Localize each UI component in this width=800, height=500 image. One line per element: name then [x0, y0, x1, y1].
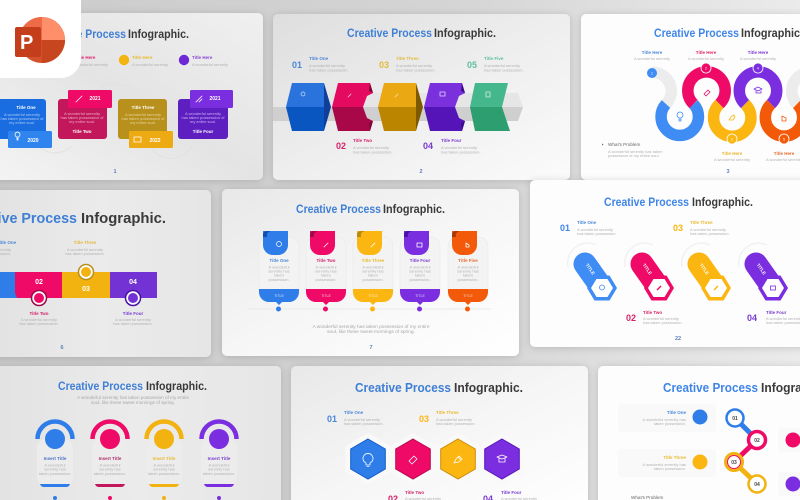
column: title four: Title Four — [410, 258, 430, 263]
card: title three: taken possession. — [654, 466, 686, 471]
legend row: Title Here — [75, 55, 96, 60]
labels: bottom row: Title Here — [722, 151, 743, 156]
card: title one: Title One — [667, 410, 686, 415]
page number: 7 — [369, 345, 373, 351]
hexagon: purple — [424, 83, 465, 131]
labels: bottom row: Title Here — [774, 151, 795, 156]
heading: slide 8: Infographic. — [454, 380, 523, 395]
card: insert title pink: serenity has — [99, 466, 121, 472]
card: title one: A wonderful serenity — [4, 112, 40, 117]
step dots: 4 — [757, 66, 759, 70]
labels: top row: has taken possession. — [577, 231, 617, 236]
labels: bottom row: has taken possession. — [643, 320, 683, 325]
card: title four: my entire soul. — [190, 119, 216, 124]
card: insert title blue: Insert Title — [44, 456, 67, 461]
column: title four: serenity has — [409, 268, 431, 274]
card: insert title yellow: taken possession. — [148, 471, 180, 476]
labels: bottom row: A wonderful serenity — [714, 157, 750, 162]
heading: slide 8: Creative Process — [355, 380, 451, 395]
column: title one: possession. — [268, 277, 290, 282]
labels: bottom row — [388, 490, 537, 500]
heading: slide 9: Creative Process — [663, 380, 758, 395]
labels: bottom row: 04 — [423, 141, 433, 151]
column: title two — [306, 231, 346, 312]
column: title one: A wonderful — [269, 264, 290, 270]
labels: bottom row: 04 — [747, 313, 757, 323]
column: title one: taken — [274, 272, 284, 278]
page number: 6 — [60, 345, 64, 351]
note: what's problem — [602, 142, 662, 158]
labels: top row: 01 — [560, 223, 570, 233]
card: insert title blue: taken possession. — [39, 471, 71, 476]
panel: slide 3 snake path — [581, 14, 800, 180]
card: title one: has taken possession of — [1, 116, 44, 121]
card: insert title pink: Insert Title — [99, 456, 122, 461]
right icons — [778, 428, 800, 496]
column: title two: A wonderful — [316, 264, 337, 270]
panel: slide 4 ribbon steps — [0, 190, 211, 357]
node network: 01 — [732, 416, 738, 422]
panel: slide 7 arched cards — [0, 366, 281, 500]
labels: top row: Title Here — [748, 50, 769, 55]
column: title two: possession. — [315, 277, 337, 282]
labels: Title Four — [123, 311, 143, 316]
heading: slide 5: Infographic. — [383, 204, 445, 216]
panel: slide 9 node network — [598, 366, 800, 500]
labels: top row: Title Here — [696, 50, 717, 55]
ribbon bar: 04 — [129, 279, 137, 286]
labels: top row: 01 — [292, 60, 302, 70]
card: title one — [618, 404, 716, 432]
node network — [726, 410, 766, 492]
labels: has taken possession. — [65, 251, 105, 256]
hexagon: yellow — [378, 83, 423, 131]
labels: A wonderful serenity — [67, 247, 103, 252]
labels: top row: Title One — [344, 410, 364, 415]
card: insert title pink: A wonderful — [100, 462, 121, 468]
card: title four: A wonderful serenity — [185, 111, 221, 116]
column: title one: serenity has — [268, 268, 290, 274]
labels: top row — [634, 50, 776, 61]
column: title four: A wonderful — [410, 264, 431, 270]
heading: slide 4: Infographic. — [81, 210, 166, 227]
step dots: 5 — [783, 138, 785, 142]
step dots: 1 — [651, 72, 653, 76]
labels: top row: Title One — [309, 56, 329, 61]
hexagon: yellow — [436, 433, 480, 485]
column: title four: taken — [415, 272, 425, 278]
labels: top row: A wonderful serenity — [396, 63, 432, 68]
card: insert title blue: A wonderful — [45, 462, 66, 468]
labels: bottom row: Title Four — [441, 138, 462, 143]
ribbon bar: 02 — [35, 279, 43, 286]
card: title one: A wonderful serenity has — [642, 417, 686, 422]
card: insert title blue — [37, 422, 73, 500]
column: title four — [400, 231, 440, 312]
badge: PowerPoint logo: P — [20, 32, 33, 54]
note: what's problem: What's Problem — [631, 495, 663, 500]
column: title three — [353, 231, 393, 312]
labels: bottom row: Title Two — [643, 310, 662, 315]
column: title five — [448, 231, 488, 312]
node network: 03 — [731, 460, 737, 466]
labels: top row: has taken possession. — [396, 68, 436, 72]
card: title three: Title Three — [663, 455, 686, 460]
ribbon bar: 03 — [82, 286, 90, 293]
card: title one: taken possession. — [654, 421, 686, 426]
note: what's problem: possession of my entire soul. — [608, 153, 660, 158]
labels: bottom row: 02 — [626, 313, 636, 323]
labels: has taken possession. — [113, 321, 153, 326]
legend row: A wonderful serenity — [132, 62, 168, 67]
labels: bottom row — [714, 151, 800, 162]
card: insert title purple: taken possession. — [203, 471, 235, 476]
labels: top row: A wonderful serenity — [740, 56, 776, 61]
column: title three: possession. — [362, 277, 384, 282]
caption — [312, 324, 430, 335]
capsule: blue: TITLE — [585, 263, 596, 276]
subtitle: A wonderful serenity has taken possession of my entire — [77, 395, 189, 400]
labels: bottom row: Title Four — [501, 490, 522, 495]
labels: top row: Title Three — [690, 220, 713, 225]
heading: slide 2: Creative Process — [347, 28, 432, 40]
card: title four: Title Four — [193, 129, 213, 134]
ribbon bar — [0, 272, 157, 298]
labels: top row: 05 — [467, 60, 477, 70]
hexagon: blue — [286, 83, 331, 131]
timeline — [248, 308, 491, 310]
labels: top row: A wonderful serenity — [688, 56, 724, 61]
card: insert title yellow: A wonderful — [154, 462, 175, 468]
labels: bottom row: Title Two — [353, 138, 372, 143]
card: title one — [0, 99, 52, 148]
labels: top row: A wonderful serenity — [309, 63, 345, 68]
capsule: pink — [625, 243, 674, 300]
labels: top row: Title Here — [642, 50, 663, 55]
labels — [0, 240, 153, 326]
page number: 1 — [113, 169, 117, 175]
capsule: yellow: TITLE — [699, 263, 710, 276]
column: title two: Title Two — [316, 258, 336, 263]
card: title two: 2021 — [89, 96, 101, 102]
labels: top row: has taken possession. — [690, 231, 730, 236]
labels: top row: 03 — [673, 223, 683, 233]
card: title two: has taken possession of — [61, 115, 104, 120]
card: title three: A wonderful serenity — [125, 112, 161, 117]
column: title two: taken — [321, 272, 331, 278]
panel: slide 2 hexagon band — [273, 14, 570, 180]
labels: top row — [292, 56, 524, 72]
card: insert title blue: serenity has — [44, 466, 66, 472]
card: title three: 2022 — [149, 138, 161, 144]
card: title three: A wonderful serenity has — [642, 462, 686, 467]
card: insert title yellow: Insert Title — [153, 456, 176, 461]
column: title three: TITLE — [368, 294, 378, 298]
panel: slide 5 tag columns — [222, 189, 519, 356]
card: insert title purple — [201, 422, 237, 500]
card: title four: 2021 — [209, 96, 221, 102]
step dots: 2 — [705, 66, 707, 70]
legend row: Title Here — [192, 55, 213, 60]
column: title five: TITLE — [463, 294, 473, 298]
column: title five: serenity has — [457, 268, 479, 274]
hexagon: blue — [346, 433, 390, 485]
badge: PowerPoint logo — [0, 0, 81, 78]
caption: soul, like these sweet mornings of spring. — [327, 329, 415, 335]
labels: bottom row: A wonderful serenity — [441, 145, 477, 150]
labels: top row: 03 — [419, 414, 429, 424]
panel: slide 6 capsules — [530, 180, 800, 347]
column: title one: Title One — [269, 258, 289, 263]
legend row: Title Here — [132, 55, 153, 60]
column: title two: TITLE — [321, 294, 331, 298]
card: insert title purple: A wonderful — [209, 462, 230, 468]
labels: top row: has taken possession. — [484, 68, 524, 72]
column: title five: A wonderful — [458, 264, 479, 270]
column: title five: taken — [463, 272, 473, 278]
column: title four: possession. — [409, 277, 431, 282]
labels: has taken possession. — [19, 321, 59, 326]
labels: Title Two — [29, 311, 49, 316]
gray band arrow — [273, 93, 523, 121]
heading: slide 6: Infographic. — [692, 197, 753, 209]
card: insert title yellow — [146, 422, 182, 500]
card: title four — [178, 90, 233, 139]
card: title two: my entire soul. — [69, 119, 95, 124]
heading: slide 1: Infographic. — [128, 29, 189, 41]
note: what's problem: What's Problem — [608, 142, 640, 147]
labels: top row: A wonderful serenity — [634, 56, 670, 61]
card: title one: my entire soul. — [9, 120, 35, 125]
legend row — [72, 55, 228, 67]
labels: bottom row — [336, 138, 481, 154]
card: title three: has taken possession of — [122, 116, 165, 121]
card: title two: A wonderful serenity — [64, 111, 100, 116]
capsule: blue — [568, 243, 617, 300]
subtitle: soul, like these sweet mornings of spring. — [91, 400, 175, 405]
column: title four: TITLE — [415, 294, 425, 298]
node network: 02 — [754, 438, 760, 444]
labels: top row: 01 — [327, 414, 337, 424]
card: title three: Title Three — [132, 105, 155, 110]
card: title three: my entire soul. — [130, 120, 156, 125]
heading: slide 7: Creative Process — [58, 381, 143, 393]
capsule: yellow — [682, 243, 731, 300]
subtitle — [77, 395, 189, 405]
legend row: A wonderful serenity — [72, 62, 108, 67]
labels: top row: A wonderful serenity — [344, 417, 380, 422]
labels: bottom row: has taken possession. — [441, 150, 481, 154]
column: title two: serenity has — [315, 268, 337, 274]
node network: 04 — [754, 482, 760, 488]
labels: bottom row: Title Two — [405, 490, 424, 495]
step dots: 3 — [731, 138, 733, 142]
heading: slide 3: Creative Process — [654, 28, 739, 40]
card: title two — [58, 90, 112, 139]
hexagon: purple — [480, 433, 524, 485]
card: title three — [618, 449, 716, 477]
heading: slide 5: Creative Process — [296, 204, 381, 216]
heading: slide 6: Creative Process — [604, 197, 689, 209]
hexagon: pink — [332, 83, 373, 131]
labels: top row: has taken possession. — [344, 421, 384, 426]
legend row: A wonderful serenity — [192, 62, 228, 67]
step badges — [32, 264, 140, 306]
panel: slide 1 timeline cards — [0, 13, 263, 180]
labels: A wonderful serenity — [115, 317, 151, 322]
labels: top row: Title Five — [484, 56, 504, 61]
labels: top row: has taken possession. — [436, 421, 476, 426]
hexagon: pink — [390, 433, 436, 485]
panel: slide 8 hexagons — [291, 366, 588, 500]
column: title three: Title Three — [362, 258, 385, 263]
labels: Title Three — [74, 240, 97, 245]
icons — [677, 87, 786, 121]
card: title one: Title One — [16, 105, 36, 110]
labels: bottom row: 02 — [336, 141, 346, 151]
card: insert title pink — [92, 422, 128, 500]
card: insert title pink: taken possession. — [94, 471, 126, 476]
column: title one — [259, 231, 299, 312]
labels: bottom row: A wonderful serenity — [353, 145, 389, 150]
card: insert title purple: serenity has — [208, 466, 230, 472]
column: title one: TITLE — [274, 294, 284, 298]
labels: top row: Title One — [577, 220, 597, 225]
labels: bottom row: A wonderful serenity — [643, 316, 679, 321]
labels: top row — [327, 410, 476, 426]
labels: top row: A wonderful serenity — [690, 227, 726, 232]
page number: 2 — [419, 169, 423, 175]
heading: slide 1: Creative Process — [41, 29, 126, 41]
step dots — [647, 63, 789, 144]
card: title two: Title Two — [72, 129, 92, 134]
card: title one: 2020 — [27, 138, 39, 144]
column: title five: Title Five — [458, 258, 478, 263]
labels: top row: Title Three — [436, 410, 459, 415]
capsule: pink: TITLE — [642, 263, 653, 276]
card: title three — [118, 99, 173, 148]
snake chart — [652, 72, 800, 136]
column: title three: A wonderful — [363, 264, 384, 270]
labels: A wonderful serenity — [21, 317, 57, 322]
page number: 22 — [675, 336, 681, 342]
labels: top row: 03 — [379, 60, 389, 70]
page number: 3 — [726, 169, 730, 175]
labels: top row: has taken possession. — [309, 68, 349, 72]
hexagon: green — [470, 83, 510, 131]
labels: bottom row — [626, 310, 800, 325]
note: what's problem: A wonderful serenity has taken — [608, 149, 662, 154]
card: title four: has taken possession of — [182, 115, 225, 120]
labels: top row — [560, 220, 730, 236]
heading: slide 7: Infographic. — [146, 381, 207, 393]
column: title three: taken — [368, 272, 378, 278]
labels: bottom row: has taken possession. — [353, 150, 393, 154]
capsule: purple — [739, 243, 788, 300]
capsule: purple: TITLE — [756, 263, 767, 276]
labels: top row: A wonderful serenity — [577, 227, 613, 232]
card: insert title purple: Insert Title — [208, 456, 231, 461]
caption: A wonderful serenity has taken possession of my entire — [312, 324, 430, 330]
card: insert title yellow: serenity has — [153, 466, 175, 472]
heading: slide 2: Infographic. — [434, 28, 496, 40]
labels: bottom row: Title Four — [766, 310, 787, 315]
column: title five: possession. — [457, 277, 479, 282]
column: title three: serenity has — [362, 268, 384, 274]
labels: top row: A wonderful serenity — [436, 417, 472, 422]
labels: top row: Title Three — [396, 56, 419, 61]
labels: top row: A wonderful serenity — [484, 63, 520, 68]
